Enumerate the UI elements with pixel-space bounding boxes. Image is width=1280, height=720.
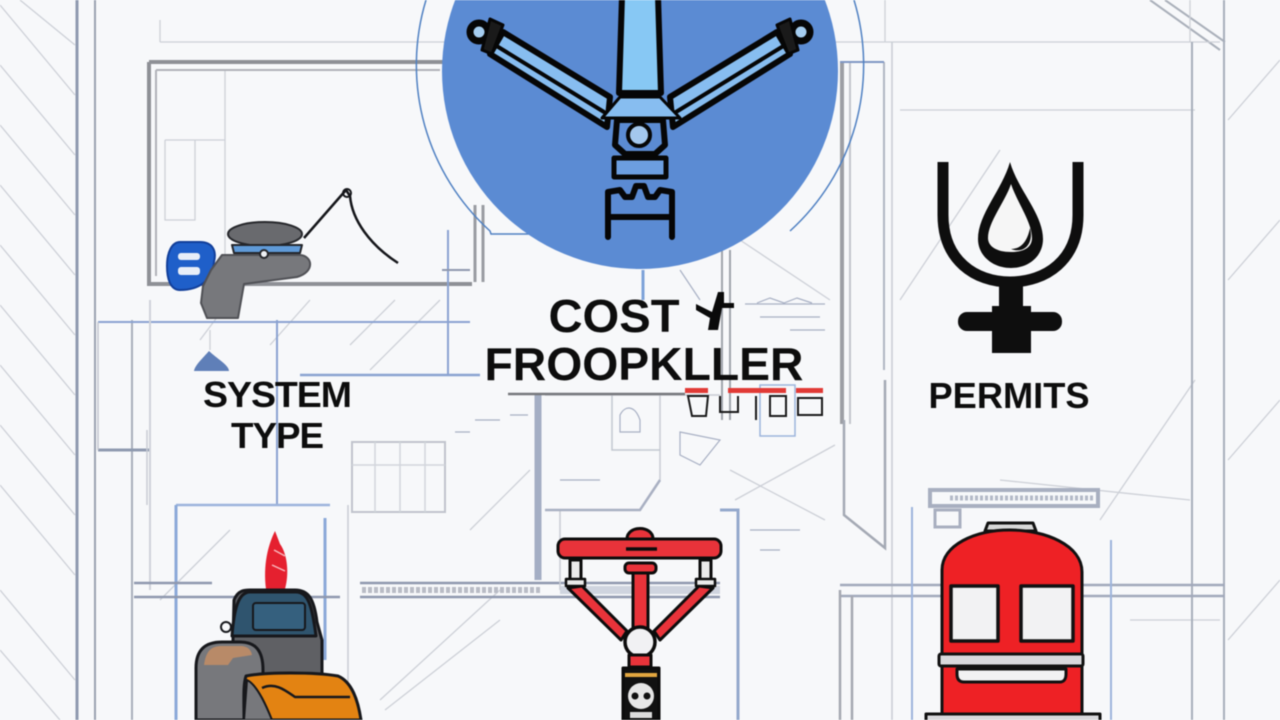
top handle: [985, 523, 1036, 531]
left arm: [490, 32, 610, 127]
outer thin circle ring: [416, 0, 864, 234]
U bracket: [943, 162, 1078, 282]
hub: [625, 627, 655, 657]
centre title: [484, 290, 804, 390]
lower slot: [957, 669, 1066, 682]
right window: [1021, 586, 1073, 641]
crossbar: [558, 539, 721, 558]
valve body: [992, 306, 1031, 353]
icon: sprinkler head: [470, 0, 810, 237]
base: [926, 714, 1100, 720]
stem: [625, 563, 656, 573]
title decoration: [508, 292, 823, 420]
centre title: COST: [548, 290, 680, 342]
underline rule: [508, 393, 685, 395]
bottom right icon: red tank: [926, 523, 1100, 720]
orange case: [244, 673, 361, 720]
red flame: [265, 531, 287, 589]
stem: [999, 282, 1023, 307]
grey valve body: [201, 255, 310, 318]
water drop: [978, 162, 1043, 268]
small handwritten blueprint notes: [455, 270, 825, 550]
upright pipe: [619, 0, 661, 93]
icon: small black pipe: [696, 292, 734, 330]
ring: [221, 622, 231, 632]
right arm end: [792, 23, 810, 41]
tank body: [942, 530, 1082, 714]
left arm end: [470, 23, 488, 41]
blue valve: [167, 242, 215, 290]
right icon: permits sprinkler: [943, 162, 1078, 353]
centre title: FROOPKLLER: [484, 338, 804, 390]
label: system type: [203, 374, 351, 456]
band: [939, 654, 1083, 666]
dark window: [232, 592, 316, 636]
bottom left icon: equipment: [196, 531, 361, 720]
bottom centre icon: red sprinkler: [558, 528, 721, 720]
label: system type: TYPE: [231, 415, 323, 456]
side posts: [570, 560, 581, 580]
left window: [951, 586, 998, 641]
right arm: [654, 586, 713, 640]
right arm: [670, 32, 790, 127]
hub: [602, 97, 680, 118]
left icon: system type: [167, 189, 398, 371]
top dome: [627, 528, 653, 539]
collar: [614, 158, 666, 177]
black wire: [304, 190, 398, 263]
cylinder: [623, 668, 659, 720]
red strips and sketch marks: [685, 388, 823, 393]
grey machine: [232, 590, 322, 680]
label: permits: PERMITS: [928, 375, 1090, 416]
brown tank: [196, 642, 263, 720]
grey disc: [228, 222, 302, 246]
label: system type: SYSTEM: [203, 374, 351, 415]
central blue circle with sprinkler icon: [442, 0, 838, 269]
deflector base: [608, 186, 672, 237]
blue circle: [442, 0, 838, 269]
joints: [566, 579, 585, 586]
droplet: [194, 351, 229, 371]
left arm: [568, 586, 627, 640]
